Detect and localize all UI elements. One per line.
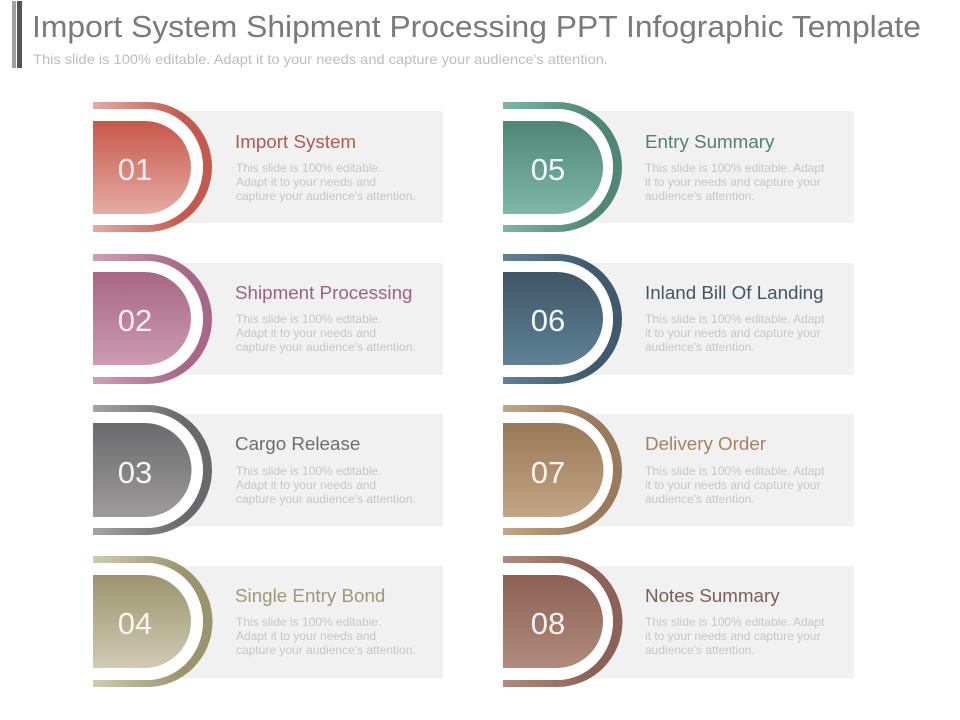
badge ring bbox=[503, 254, 622, 384]
body text: capture your audience's attention. bbox=[236, 643, 416, 657]
badge fill bbox=[503, 121, 603, 214]
badge white gap bbox=[503, 261, 613, 377]
body text: Adapt it to your needs and bbox=[236, 326, 376, 340]
heading: Notes Summary bbox=[645, 585, 780, 606]
card background bbox=[560, 263, 854, 375]
title: Import System Shipment Processing PPT Infographic Template bbox=[32, 9, 921, 44]
heading: Import System bbox=[235, 131, 356, 152]
body text: capture your audience's attention. bbox=[236, 492, 416, 506]
heading: Single Entry Bond bbox=[235, 585, 385, 606]
body text: it to your needs and capture your bbox=[645, 478, 820, 492]
title accent bars bbox=[12, 1, 22, 68]
body text: This slide is 100% editable. Adapt bbox=[645, 312, 825, 326]
heading: Delivery Order bbox=[645, 433, 766, 454]
panel: 05 Entry Summary bbox=[503, 102, 854, 232]
subtitle: This slide is 100% editable. Adapt it to your needs and capture your audience's attention. bbox=[33, 51, 608, 67]
number: 02 bbox=[118, 303, 152, 338]
card background bbox=[150, 414, 443, 526]
card background bbox=[150, 566, 443, 678]
card background bbox=[150, 111, 443, 223]
body text: audience's attention. bbox=[645, 189, 755, 203]
number: 07 bbox=[531, 455, 565, 490]
body text: This slide is 100% editable. Adapt bbox=[645, 615, 825, 629]
badge ring bbox=[503, 102, 622, 232]
number: 05 bbox=[531, 152, 565, 187]
card background bbox=[560, 111, 854, 223]
body text: audience's attention. bbox=[645, 643, 755, 657]
body text: capture your audience's attention. bbox=[236, 340, 416, 354]
body text: Adapt it to your needs and bbox=[236, 175, 376, 189]
badge fill bbox=[93, 423, 191, 517]
badge fill bbox=[93, 575, 191, 668]
panel: 06 Inland Bill Of Landing bbox=[503, 254, 854, 384]
body text: it to your needs and capture your bbox=[645, 629, 820, 643]
body text: This slide is 100% editable. bbox=[236, 615, 381, 629]
card background bbox=[560, 414, 854, 526]
panel: 03 Cargo Release bbox=[93, 405, 443, 535]
badge ring bbox=[93, 405, 212, 535]
badge ring bbox=[503, 556, 622, 687]
badge fill bbox=[93, 272, 191, 365]
badge white gap bbox=[503, 109, 613, 225]
number: 08 bbox=[531, 606, 565, 641]
badge white gap bbox=[93, 261, 203, 377]
badge white gap bbox=[93, 109, 203, 225]
panel: 07 Delivery Order bbox=[503, 405, 854, 535]
body text: it to your needs and capture your bbox=[645, 175, 820, 189]
badge fill bbox=[503, 272, 603, 365]
body text: Adapt it to your needs and bbox=[236, 629, 376, 643]
body text: audience's attention. bbox=[645, 492, 755, 506]
number: 06 bbox=[531, 303, 565, 338]
panel: 04 Single Entry Bond bbox=[93, 556, 443, 687]
badge ring bbox=[93, 102, 212, 232]
body text: it to your needs and capture your bbox=[645, 326, 820, 340]
panel: 01 Import System bbox=[93, 102, 443, 232]
badge ring bbox=[93, 556, 212, 687]
badge fill bbox=[93, 121, 191, 214]
heading: Entry Summary bbox=[645, 131, 775, 152]
badge fill bbox=[503, 423, 604, 517]
badge white gap bbox=[503, 563, 613, 680]
badge white gap bbox=[503, 412, 613, 528]
heading: Shipment Processing bbox=[235, 282, 412, 303]
body text: This slide is 100% editable. Adapt bbox=[645, 464, 825, 478]
card background bbox=[560, 566, 854, 678]
body text: This slide is 100% editable. bbox=[236, 312, 381, 326]
heading: Cargo Release bbox=[235, 433, 360, 454]
panel: 08 Notes Summary bbox=[503, 556, 854, 687]
panel: 02 Shipment Processing bbox=[93, 254, 443, 384]
body text: This slide is 100% editable. bbox=[236, 161, 381, 175]
badge white gap bbox=[93, 563, 203, 680]
badge fill bbox=[503, 575, 603, 668]
number: 03 bbox=[118, 455, 152, 490]
badge white gap bbox=[93, 412, 203, 528]
number: 01 bbox=[118, 152, 152, 187]
body text: Adapt it to your needs and bbox=[236, 478, 376, 492]
body text: capture your audience's attention. bbox=[236, 189, 416, 203]
number: 04 bbox=[118, 606, 152, 641]
badge ring bbox=[503, 405, 622, 535]
body text: audience's attention. bbox=[645, 340, 755, 354]
badge ring bbox=[93, 254, 212, 384]
card background bbox=[150, 263, 443, 375]
body text: This slide is 100% editable. Adapt bbox=[645, 161, 825, 175]
heading: Inland Bill Of Landing bbox=[645, 282, 824, 303]
body text: This slide is 100% editable. bbox=[236, 464, 381, 478]
